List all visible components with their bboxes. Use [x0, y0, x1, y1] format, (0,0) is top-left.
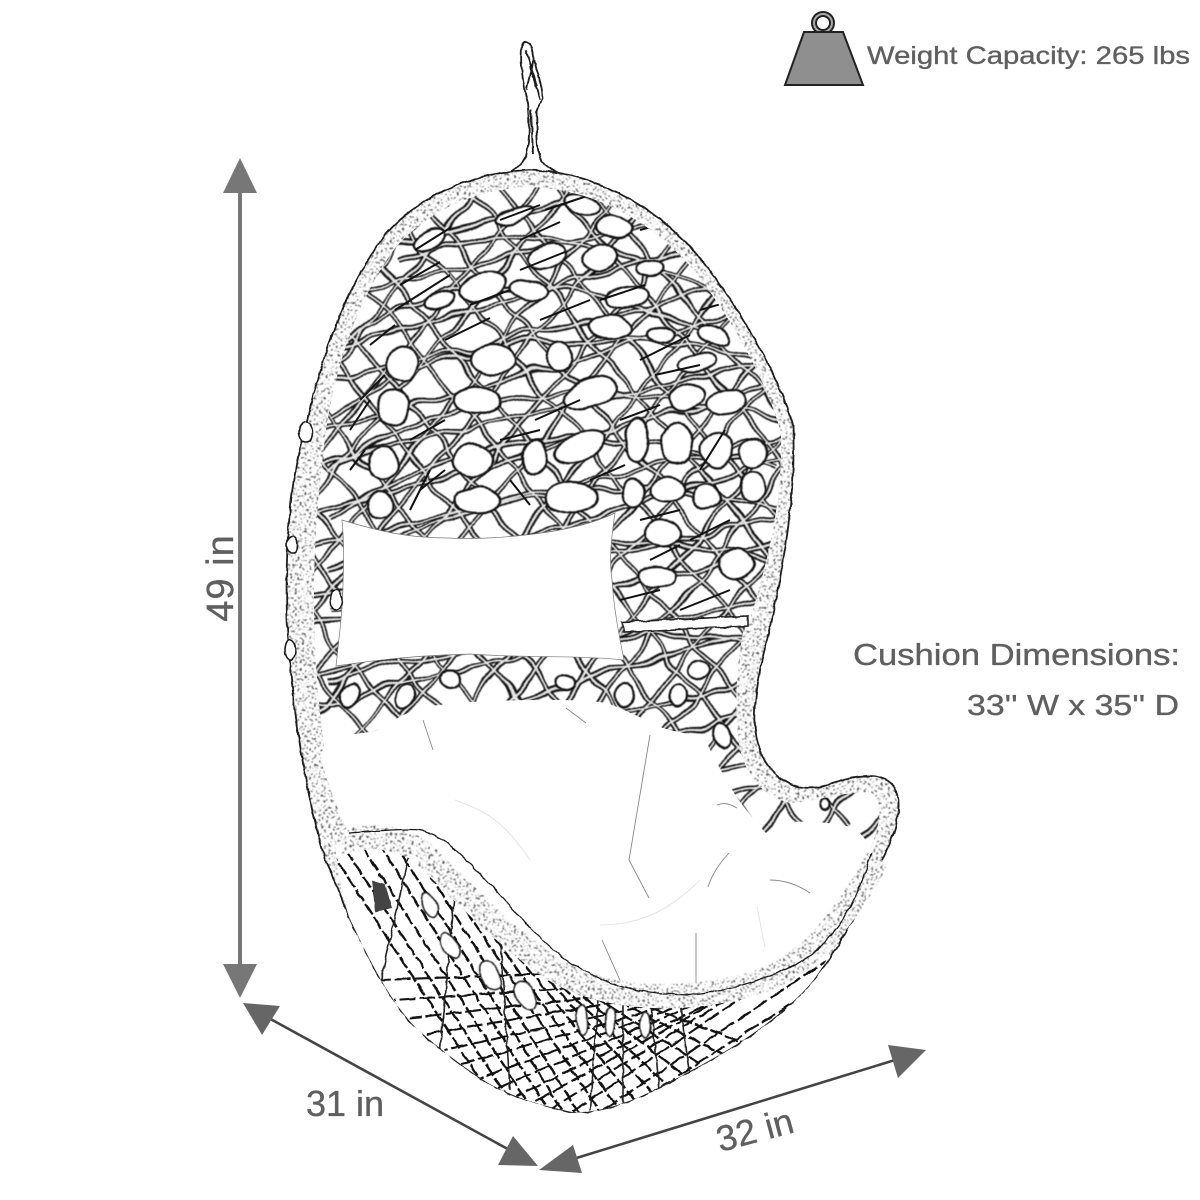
cushion dimensions text: Cushion Dimensions: — [853, 637, 1180, 672]
cushion dimensions text — [853, 637, 1180, 722]
depth arrow: 31 in — [243, 1003, 538, 1166]
hanging strap — [506, 42, 560, 174]
weight capacity text: Weight Capacity: 265 lbs — [867, 42, 1190, 70]
icon: weight — [785, 14, 863, 85]
bumpy left edge details — [285, 422, 342, 660]
cushion dimensions text: 33'' W x 35'' D — [967, 690, 1179, 722]
dark strand accents — [350, 195, 735, 610]
seat cushion — [321, 700, 872, 995]
height arrow: 49 in — [223, 158, 257, 998]
width arrow: 32 in — [539, 1045, 926, 1173]
height label: 49 in — [200, 534, 242, 622]
width label: 32 in — [712, 1100, 798, 1160]
chair illustration — [284, 40, 900, 1138]
egg shell body and stippled rim — [287, 170, 899, 1112]
woven basket front — [335, 846, 831, 1112]
infographic canvas — [205, 11, 1190, 1173]
front rim of seat — [338, 829, 878, 996]
woven back — [276, 187, 880, 1158]
horizontal seat band — [622, 616, 748, 632]
open weave cells — [336, 192, 830, 809]
lumbar pillow — [336, 513, 624, 666]
depth label: 31 in — [306, 1083, 384, 1124]
